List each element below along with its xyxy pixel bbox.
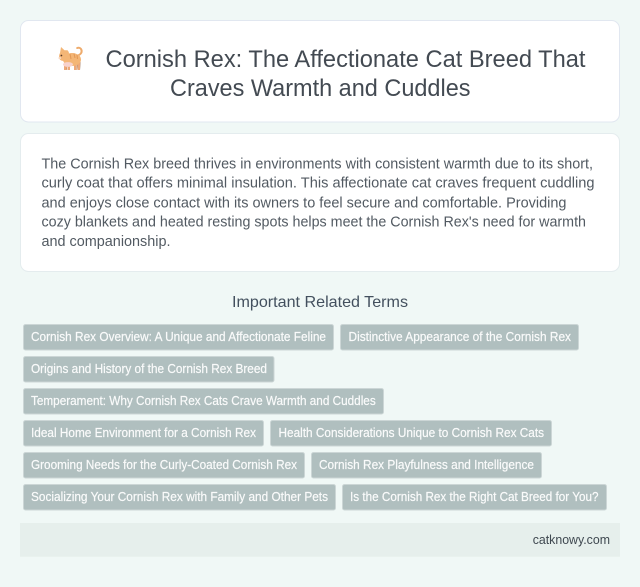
tag: overview: Cornish Rex Overview: A Unique and Affectionate Feline <box>31 330 326 344</box>
tag: socializing <box>24 484 336 510</box>
tag: grooming <box>24 452 304 478</box>
footer source text: catknowy.com <box>533 532 610 547</box>
panel: description card <box>20 134 620 272</box>
tag: grooming: Grooming Needs for the Curly-Coated Cornish Rex <box>31 458 298 472</box>
tag: temperament: Temperament: Why Cornish Rex Cats Crave Warmth and Cuddles <box>31 394 376 408</box>
title <box>106 46 586 102</box>
title: Craves Warmth and Cuddles <box>170 75 470 102</box>
description text: curly coat that offers minimal insulation. This affectionate cat craves frequent cuddling <box>42 175 594 192</box>
tag: playfulness: Cornish Rex Playfulness and Intelligence <box>319 458 534 472</box>
footer bar <box>20 523 620 557</box>
tag: temperament <box>24 388 384 414</box>
tag: origins: Origins and History of the Cornish Rex Breed <box>31 362 267 376</box>
tag: health: Health Considerations Unique to Cornish Rex Cats <box>278 426 544 440</box>
description text <box>42 155 594 250</box>
title: Cornish Rex: The Affectionate Cat Breed That <box>106 46 586 73</box>
tag: health <box>270 420 552 446</box>
tag: home environment: Ideal Home Environment for a Cornish Rex <box>31 426 257 440</box>
panel: title card <box>20 20 620 122</box>
tag list <box>24 324 606 510</box>
description text: and enjoys close contact with its owners to feel secure and comfortable. Providing <box>42 194 566 211</box>
tag: overview <box>24 324 334 350</box>
tag: origins <box>24 356 274 382</box>
tag: socializing: Socializing Your Cornish Rex with Family and Other Pets <box>31 490 328 504</box>
icon: cat <box>58 47 82 70</box>
heading: related terms: Important Related Terms <box>232 294 408 311</box>
tag: appearance <box>340 324 578 350</box>
description text: The Cornish Rex breed thrives in environments with consistent warmth due to its short, <box>42 155 593 172</box>
description text: cozy blankets and heated resting spots helps meet the Cornish Rex's need for warmth <box>42 214 586 231</box>
tag: right breed: Is the Cornish Rex the Right Cat Breed for You? <box>350 490 599 504</box>
tag: right breed <box>342 484 606 510</box>
tag: appearance: Distinctive Appearance of the Cornish Rex <box>348 330 572 344</box>
description text: and companionship. <box>42 233 170 250</box>
tag: playfulness <box>312 452 542 478</box>
tag: home environment <box>24 420 264 446</box>
